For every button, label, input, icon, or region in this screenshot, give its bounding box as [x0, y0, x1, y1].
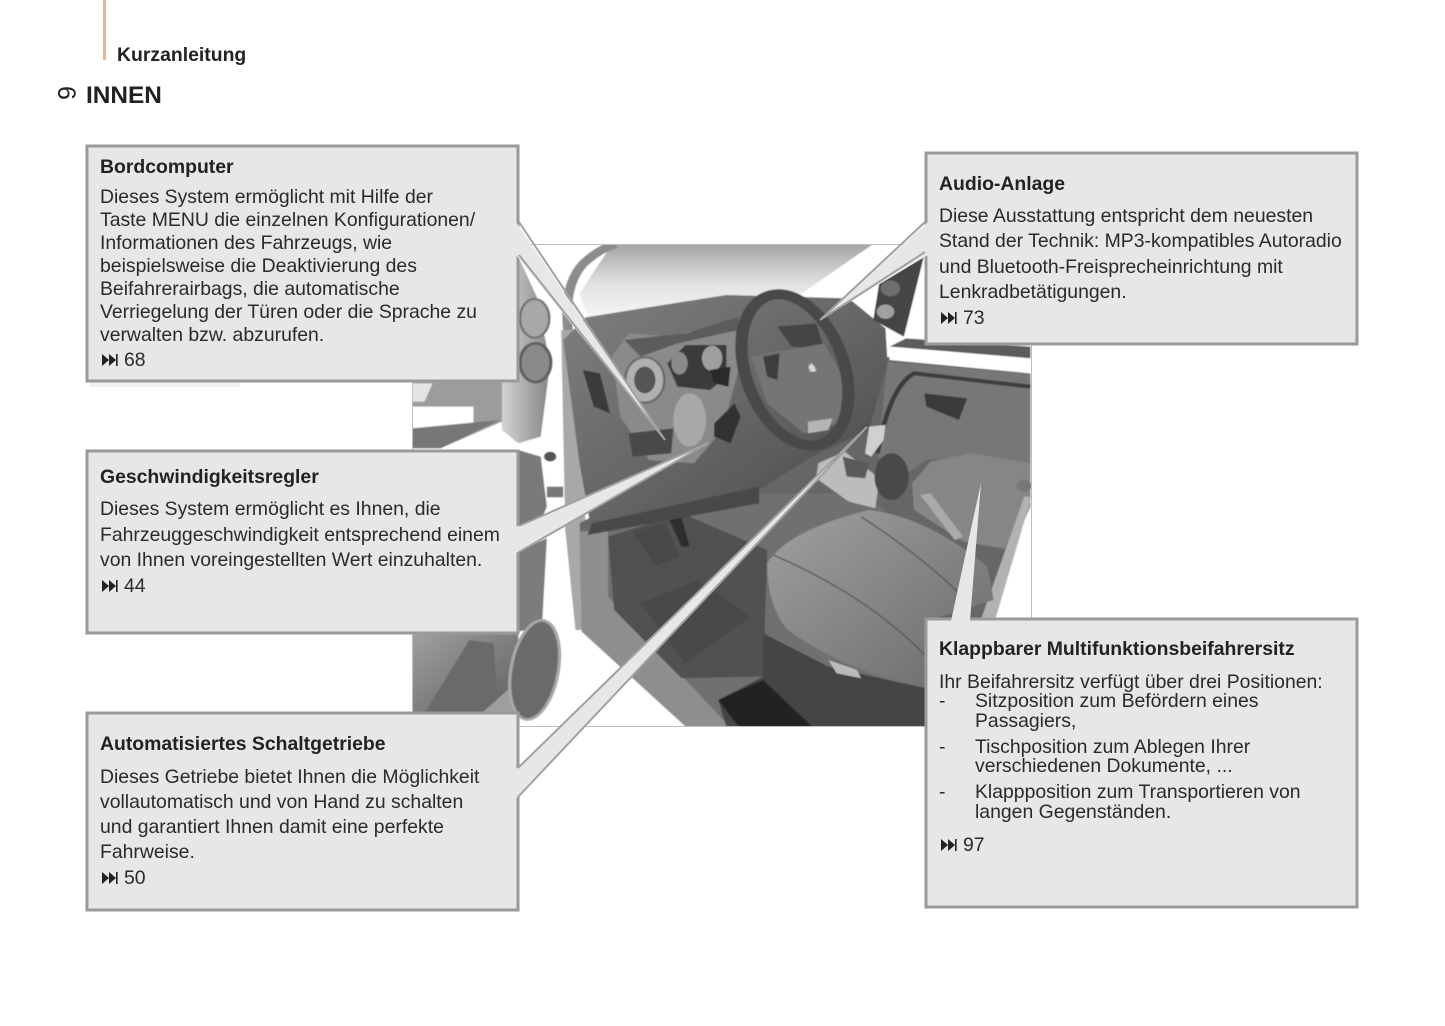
panel: Bordcomputer: Taste MENU die einzelnen Konfigurationen/ [100, 209, 476, 231]
panel: Bordcomputer: Beifahrerairbags, die automatische [100, 278, 400, 300]
panel: Bordcomputer: Bordcomputer [100, 156, 234, 178]
right pillar [873, 255, 924, 337]
pointer: Bordcomputer [516, 222, 665, 440]
windscreen [580, 244, 873, 317]
panel: Automatisiertes Schaltgetriebe: vollautomatisch und von Hand zu schalten [100, 791, 463, 813]
pedal [636, 524, 678, 564]
panel: Geschwindigkeitsregler [87, 451, 518, 633]
panel: Klappbarer Multifunktionsbeifahrersitz: Tischposition zum Ablegen Ihrer [975, 736, 1251, 758]
panel: Geschwindigkeitsregler: Dieses System ermöglicht es Ihnen, die [100, 498, 441, 520]
panel: Automatisiertes Schaltgetriebe: Fahrweise. [100, 841, 195, 863]
seat lower [718, 633, 926, 727]
panel: Klappbarer Multifunktionsbeifahrersitz: langen Gegenständen. [975, 801, 1171, 823]
pointer: Automatisiertes Schaltgetriebe [515, 427, 867, 800]
panel: Audio-Anlage: 73 [963, 307, 985, 329]
gear console [816, 452, 879, 508]
panel: Automatisiertes Schaltgetriebe: 50 [124, 867, 146, 889]
panel: Audio-Anlage [926, 153, 1357, 344]
pillar stripe [561, 330, 586, 630]
panel: Audio-Anlage: Diese Ausstattung entspricht dem neuesten [939, 205, 1313, 227]
lower switches [628, 428, 673, 457]
panel: Automatisiertes Schaltgetriebe: und garantiert Ihnen damit eine perfekte [100, 816, 444, 838]
panel: Klappbarer Multifunktionsbeifahrersitz [926, 619, 1357, 907]
interior base [579, 356, 1031, 618]
sill [580, 532, 739, 727]
audio unit [778, 323, 822, 348]
panel: Geschwindigkeitsregler: von Ihnen voreingestellten Wert einzuhalten. [100, 549, 482, 571]
pointer: Geschwindigkeitsregler [516, 443, 708, 553]
panel: Klappbarer Multifunktionsbeifahrersitz: Klappbarer Multifunktionsbeifahrersitz [939, 638, 1295, 660]
A-pillar arc [567, 244, 616, 340]
panel: Klappbarer Multifunktionsbeifahrersitz: - [939, 690, 945, 712]
dashboard [563, 295, 888, 533]
panel: Klappbarer Multifunktionsbeifahrersitz: Sitzposition zum Befördern eines [975, 690, 1258, 712]
panel: Automatisiertes Schaltgetriebe: Automatisiertes Schaltgetriebe [100, 733, 386, 755]
panel: Klappbarer Multifunktionsbeifahrersitz: 97 [963, 834, 985, 856]
panel: Klappbarer Multifunktionsbeifahrersitz: Klappposition zum Transportieren von [975, 781, 1301, 803]
panel: Automatisiertes Schaltgetriebe: Dieses Getriebe bietet Ihnen die Möglichkeit [100, 766, 480, 788]
pointer: Audio-Anlage [820, 222, 928, 320]
panel: Bordcomputer: 68 [124, 349, 146, 371]
lower door [412, 633, 518, 713]
panel: Klappbarer Multifunktionsbeifahrersitz: verschiedenen Dokumente, ... [975, 755, 1233, 777]
mirror shapes [412, 382, 502, 448]
floor mat [608, 513, 767, 678]
panel: Klappbarer Multifunktionsbeifahrersitz: Passagiers, [975, 710, 1076, 732]
steering wheel hub [751, 343, 845, 433]
right door [877, 362, 1030, 477]
panel: Audio-Anlage: Audio-Anlage [939, 173, 1065, 195]
panel: Geschwindigkeitsregler: 44 [124, 575, 146, 597]
dash speaker [625, 357, 664, 403]
panel: Bordcomputer: verwalten bzw. abzurufen. [100, 324, 324, 346]
white strip [890, 338, 1030, 358]
door jamb [518, 450, 547, 527]
rear seat back [912, 453, 1030, 550]
page number: 6 [52, 86, 80, 100]
panel: Audio-Anlage: Lenkradbetätigungen. [939, 281, 1127, 303]
panel: Audio-Anlage: und Bluetooth-Freisprecheinrichtung mit [939, 256, 1283, 278]
illustration frame [412, 244, 1032, 726]
panel: Bordcomputer: beispielsweise die Deaktivierung des [100, 255, 417, 277]
passenger seat base [767, 510, 994, 688]
title: INNEN [86, 82, 162, 109]
panel: Bordcomputer: Verriegelung der Türen oder die Sprache zu [100, 301, 477, 323]
illustration: vehicle interior: ♞ [806, 362, 818, 374]
steering wheel rim [735, 288, 854, 450]
air vent [583, 370, 610, 413]
illustration: vehicle interior [412, 244, 1032, 727]
panel: Klappbarer Multifunktionsbeifahrersitz: - [939, 736, 945, 758]
instrument cluster [667, 345, 726, 390]
footwell [579, 494, 884, 718]
pointer: Klappbarer Multifunktionsbeifahrersitz [951, 483, 981, 621]
panel: Bordcomputer: Informationen des Fahrzeugs, wie [100, 232, 392, 254]
panel: Klappbarer Multifunktionsbeifahrersitz: - [939, 781, 945, 803]
panel: Geschwindigkeitsregler: Geschwindigkeitsregler [100, 466, 319, 488]
panel: Automatisiertes Schaltgetriebe [87, 713, 518, 910]
panel: Bordcomputer [87, 146, 518, 387]
right pillar post [981, 497, 1032, 618]
header accent bar [103, 0, 106, 60]
panel: Bordcomputer: Dieses System ermöglicht mit Hilfe der [100, 186, 434, 208]
panel: Klappbarer Multifunktionsbeifahrersitz: Ihr Beifahrersitz verfügt über drei Positionen: [939, 671, 1323, 693]
panel: Geschwindigkeitsregler: Fahrzeuggeschwindigkeit entsprechend einem [100, 524, 500, 546]
section label: Kurzanleitung [117, 44, 246, 66]
panel: Audio-Anlage: Stand der Technik: MP3-kompatibles Autoradio [939, 230, 1342, 252]
door left upper [501, 260, 549, 444]
